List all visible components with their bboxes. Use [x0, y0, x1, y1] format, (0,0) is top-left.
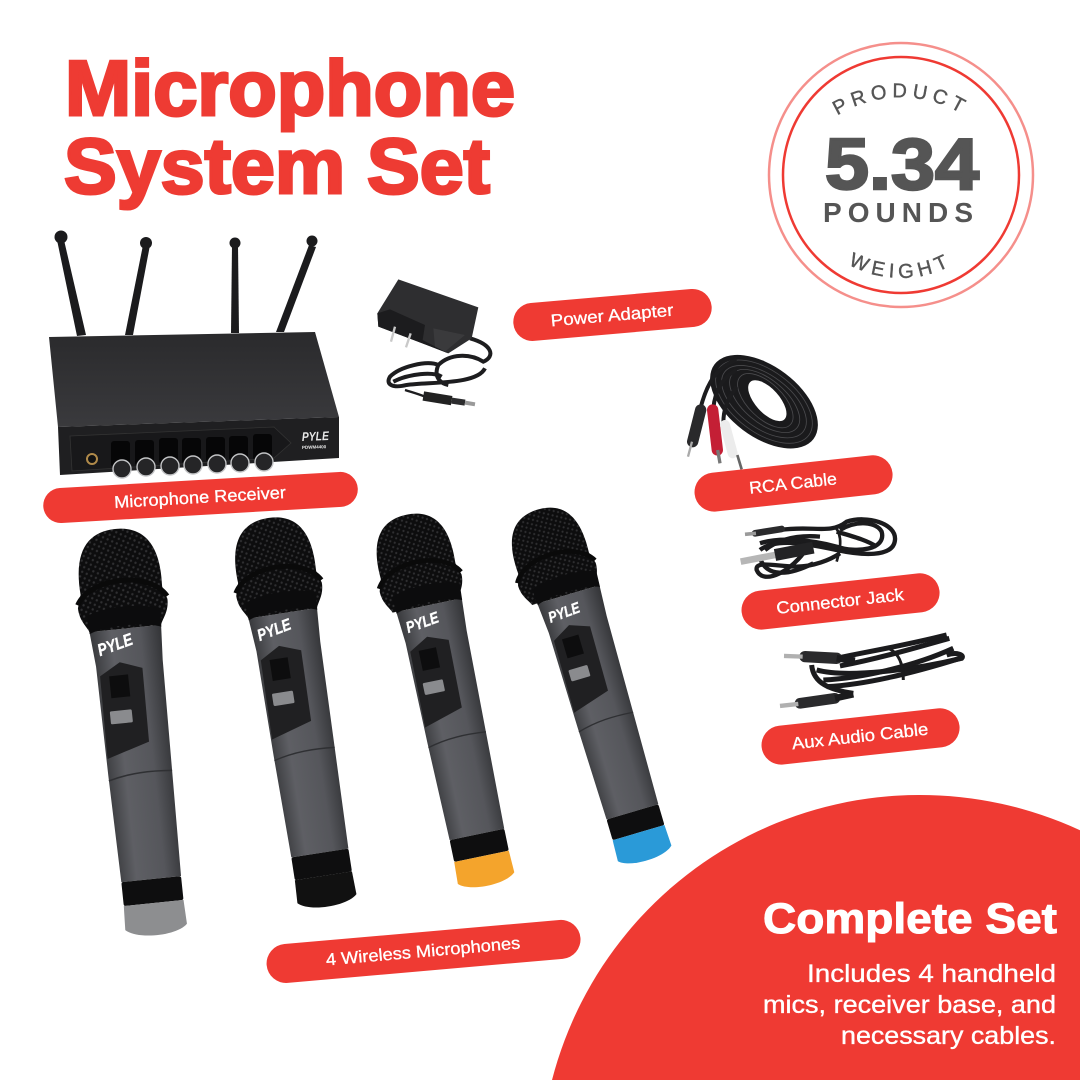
- mic logo: PYLE: [95, 630, 136, 660]
- adapter cord: [389, 338, 490, 397]
- mic handle: [537, 585, 664, 821]
- mic grille: [365, 506, 466, 614]
- aux loops: [812, 635, 962, 693]
- receiver top face: [49, 332, 339, 427]
- headphone jack: [87, 454, 97, 464]
- label: aux audio cable: [760, 706, 962, 767]
- label: power adapter: Power Adapter: [550, 301, 675, 330]
- corner heading: Complete Set: [763, 895, 1057, 943]
- jack large plug: [741, 555, 775, 562]
- adapter prongs: [391, 327, 411, 347]
- label: RCA cable: [693, 453, 895, 514]
- aux plugs: [805, 657, 837, 658]
- title: [64, 44, 515, 210]
- mic handle: [248, 608, 354, 858]
- microphone 2: [225, 511, 371, 913]
- RCA coil: [693, 336, 835, 467]
- label: power adapter: [512, 287, 713, 343]
- title: Microphone: [65, 44, 515, 132]
- mic handle: [89, 625, 187, 883]
- connector jack cable: [741, 519, 895, 577]
- mic seam: [108, 769, 173, 781]
- microphone 1: [70, 524, 202, 940]
- mic seam: [427, 731, 487, 748]
- mic seam: [578, 711, 634, 732]
- antennas: [54, 230, 318, 336]
- title: System Set: [64, 122, 490, 210]
- mic handle: [396, 598, 510, 841]
- RCA cable: [688, 336, 835, 469]
- microphone 3: [365, 506, 525, 895]
- RCA plugs: [693, 410, 701, 442]
- label: connector jack: Connector Jack: [775, 585, 905, 618]
- knobs: [111, 434, 273, 478]
- label: microphone receiver: Microphone Receiver: [114, 483, 287, 512]
- mic end cap: [291, 849, 352, 880]
- mic logo: PYLE: [546, 599, 583, 627]
- label: aux audio cable: Aux Audio Cable: [791, 720, 929, 753]
- label: RCA cable: RCA Cable: [748, 469, 838, 498]
- weight badge: PRODUCT: [832, 83, 967, 115]
- label: connector jack: [740, 571, 942, 632]
- receiver logo: [302, 429, 330, 450]
- corner body text: [763, 960, 1056, 1050]
- mic switch panel: [407, 633, 465, 727]
- corner panel: complete set: [552, 795, 1080, 1080]
- control panel outline: [70, 427, 291, 471]
- mic seam: [274, 746, 335, 761]
- jack small plug: [755, 529, 782, 533]
- mic logo: PYLE: [255, 615, 294, 645]
- corner body text: mics, receiver base, and: [763, 991, 1056, 1019]
- mic grille: [499, 498, 602, 607]
- mic logo: PYLE: [404, 609, 441, 637]
- mic end cap: [607, 804, 664, 840]
- receiver logo: PDWM4400: [302, 444, 327, 450]
- mic switch panel: [550, 620, 612, 713]
- adapter body: [377, 279, 478, 353]
- mic switch panel: [258, 643, 314, 740]
- label: microphone receiver: [42, 471, 359, 524]
- adapter label: [433, 328, 465, 352]
- corner body text: necessary cables.: [841, 1022, 1056, 1050]
- label: 4 wireless microphones: [265, 918, 582, 985]
- weight badge: WEIGHT: [852, 252, 945, 278]
- receiver front face: [58, 417, 339, 475]
- mic end cap: [121, 876, 183, 906]
- mic grille: [70, 524, 170, 633]
- weight badge: 5.34: [825, 125, 979, 205]
- label: 4 wireless microphones: 4 Wireless Microphones: [325, 934, 521, 969]
- mic switch panel: [98, 660, 151, 759]
- receiver logo: PYLE: [302, 429, 330, 444]
- weight badge: POUNDS: [823, 197, 973, 228]
- jack loops: [757, 519, 895, 577]
- aux audio cable: [780, 635, 962, 706]
- microphone 4: [499, 498, 680, 873]
- mic end cap: [450, 829, 509, 862]
- power adapter: [377, 279, 490, 404]
- weight badge: [768, 42, 1034, 308]
- mic grille: [225, 511, 326, 620]
- DC plug: [423, 396, 452, 401]
- receiver base with antennas: [49, 230, 339, 478]
- corner body text: Includes 4 handheld: [807, 960, 1056, 988]
